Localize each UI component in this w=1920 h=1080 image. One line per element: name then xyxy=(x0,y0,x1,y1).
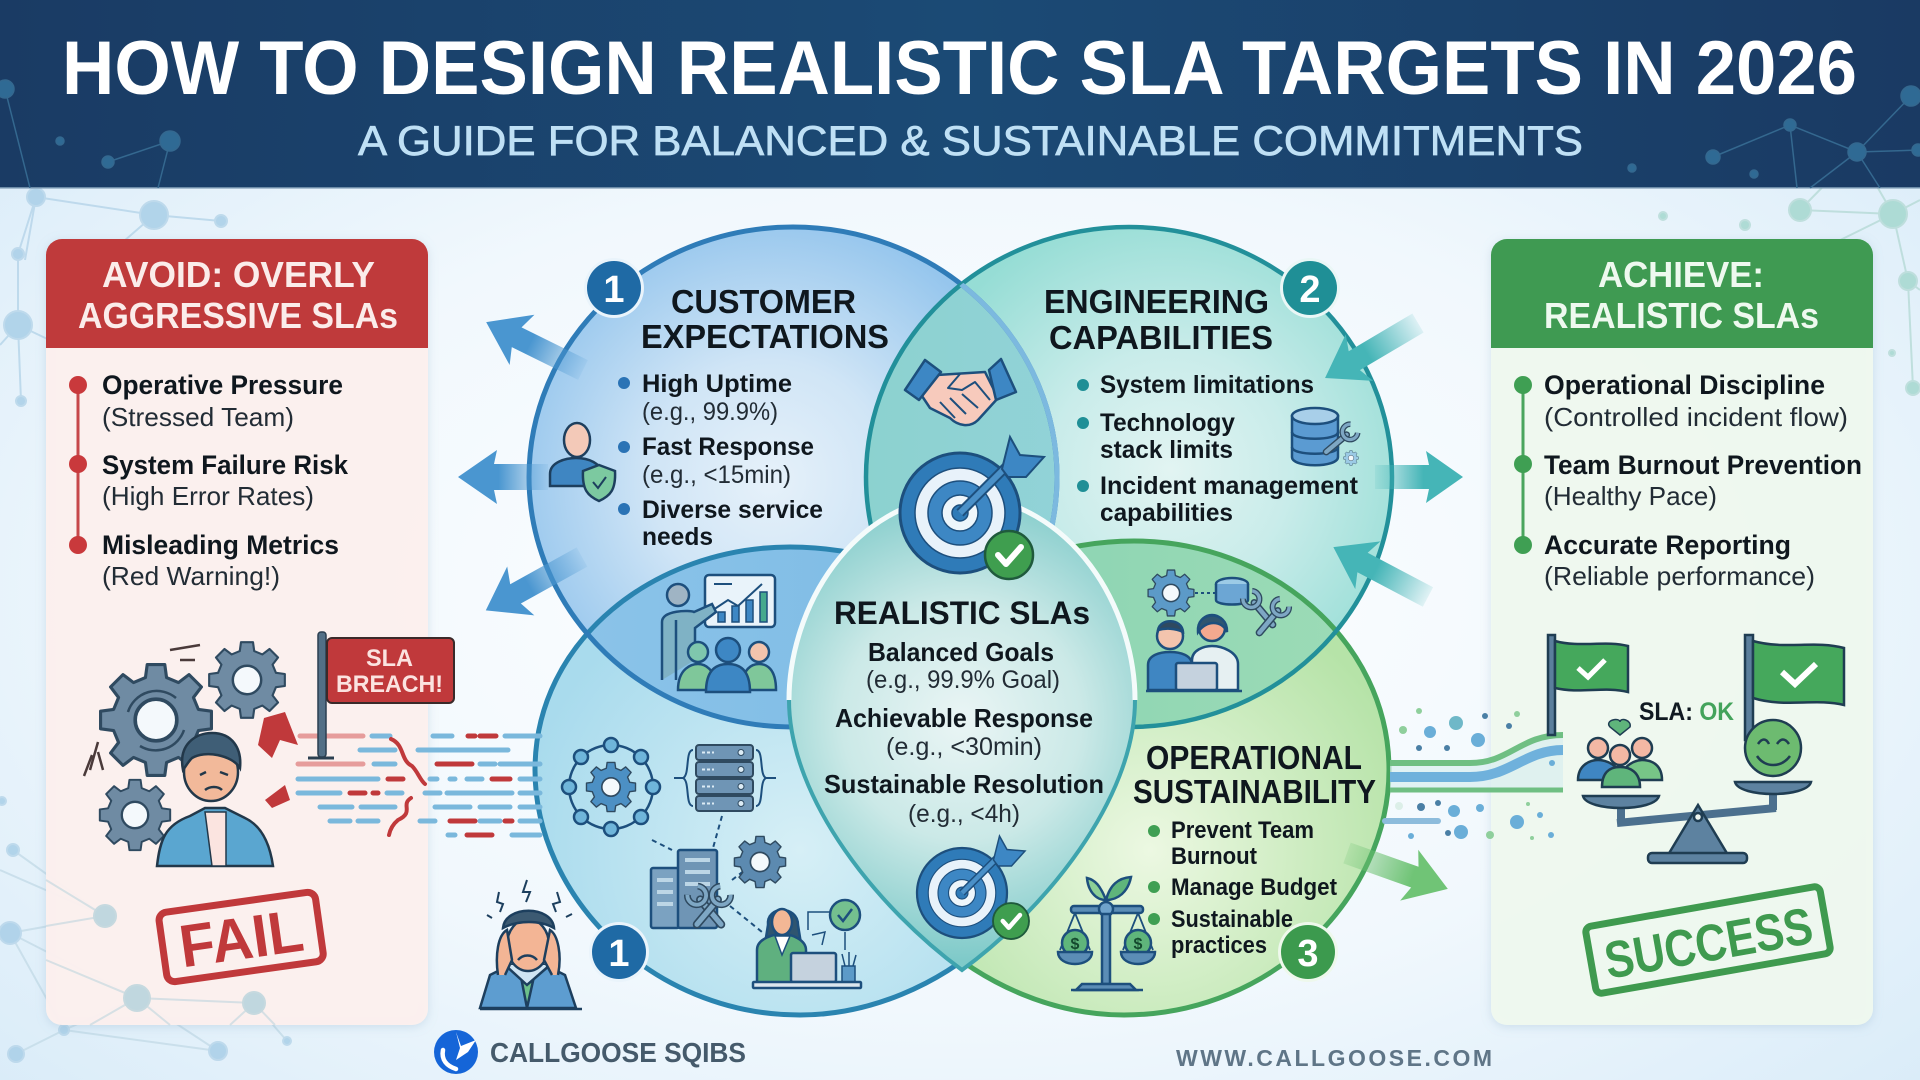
heading: CUSTOMER xyxy=(671,283,856,320)
panel heading: avoid: AVOID: OVERLY xyxy=(102,254,375,295)
center text: Balanced Goals xyxy=(868,637,1054,667)
icon: balance scale xyxy=(1583,782,1811,863)
heading: ENGINEERING xyxy=(1044,283,1269,320)
bullets: Incident management xyxy=(1100,472,1359,500)
panel heading: avoid: AGGRESSIVE SLAs xyxy=(78,295,398,336)
flag: SLA breach: SLA xyxy=(366,645,413,672)
avoid list: (Stressed Team) xyxy=(102,402,294,432)
badge 3 xyxy=(1278,922,1338,982)
overlap: customer and engineering xyxy=(868,288,1054,523)
achieve list: (Reliable performance) xyxy=(1544,561,1815,591)
avoid list: System Failure Risk xyxy=(102,450,349,480)
avoid list: (Red Warning!) xyxy=(102,561,280,591)
bullets: Diverse service xyxy=(642,496,823,524)
flag: SLA breach: BREACH! xyxy=(336,671,443,698)
title: HOW TO DESIGN REALISTIC SLA TARGETS IN 2026 xyxy=(62,26,1857,111)
section: lower left icons xyxy=(562,738,861,988)
achieve list: Team Burnout Prevention xyxy=(1544,450,1862,480)
logo: Callgoose SQIBS: CALLGOOSE SQIBS xyxy=(490,1037,746,1068)
center heading: REALISTIC SLAs xyxy=(834,595,1090,631)
flag: left xyxy=(1548,635,1628,735)
bullets: Sustainable xyxy=(1171,906,1293,933)
bullets: System limitations xyxy=(1100,371,1314,399)
bullets: practices xyxy=(1171,932,1267,959)
panel heading: avoid xyxy=(46,239,428,348)
faint network nodes showing through panel xyxy=(46,880,275,1025)
badge 2: 2 xyxy=(1299,269,1321,311)
bullets xyxy=(1148,817,1337,959)
icon: balance with sprout: $ xyxy=(1134,936,1143,953)
bullets: (e.g., <15min) xyxy=(642,461,791,489)
center text: (e.g., <4h) xyxy=(908,800,1020,828)
icon: target with check, bottom xyxy=(917,836,1029,939)
heading: CAPABILITIES xyxy=(1049,319,1273,356)
icon: user with shield xyxy=(550,423,615,501)
bullets: Technology xyxy=(1100,409,1235,437)
bullets xyxy=(618,370,823,551)
circle: engineering capabilities xyxy=(866,227,1392,727)
panel heading: achieve: REALISTIC SLAs xyxy=(1544,295,1819,336)
panel heading: achieve xyxy=(1491,239,1873,348)
overlap: customer and lower left xyxy=(590,550,840,724)
avoid list xyxy=(69,370,349,591)
bullets: capabilities xyxy=(1100,499,1233,527)
badge 1 lower: 1 xyxy=(608,933,630,975)
center text: (e.g., 99.9% Goal) xyxy=(866,666,1060,694)
achieve list: Accurate Reporting xyxy=(1544,530,1791,560)
flag: right xyxy=(1745,635,1844,740)
icon: balance with sprout: $ xyxy=(1071,936,1080,953)
badge 1 xyxy=(584,258,644,318)
icon: server stack xyxy=(652,745,776,932)
avoid list: Misleading Metrics xyxy=(102,530,339,560)
circle outlines xyxy=(529,227,1392,1015)
bullets: Burnout xyxy=(1171,843,1257,870)
heading: OPERATIONAL xyxy=(1146,739,1362,776)
badge 2 xyxy=(1280,258,1340,318)
center text xyxy=(824,637,1104,828)
avoid list: Operative Pressure xyxy=(102,370,343,400)
section: customer expectations xyxy=(550,258,889,551)
label: SLA OK: SLA: OK xyxy=(1639,698,1734,726)
icon: team with gears and laptop xyxy=(1146,570,1291,691)
heading: SUSTAINABILITY xyxy=(1133,773,1376,810)
icon: balance with sprout xyxy=(1058,877,1155,990)
icon: gear network xyxy=(562,738,660,836)
logo: Callgoose SQIBS xyxy=(434,1030,746,1074)
bullets: needs xyxy=(642,523,713,551)
arrows: outward blue arrows xyxy=(458,297,596,635)
icon: tower servers with tools xyxy=(651,836,786,930)
center text: (e.g., <30min) xyxy=(886,733,1042,761)
footer website: WWW.CALLGOOSE.COM xyxy=(1176,1045,1492,1071)
icon: team with heart xyxy=(1578,720,1662,787)
heading xyxy=(1044,283,1273,356)
section: engineering capabilities xyxy=(1044,258,1359,691)
achieve list: (Controlled incident flow) xyxy=(1544,402,1848,432)
illustration: flags, scale and team xyxy=(1548,635,1844,863)
circle: lower left xyxy=(535,547,1073,1015)
circle: customer expectations xyxy=(529,227,1057,727)
icon: presenter with chart and audience xyxy=(662,575,776,692)
badge 1: 1 xyxy=(603,269,625,311)
badge 3: 3 xyxy=(1297,933,1319,975)
heading: EXPECTATIONS xyxy=(641,318,889,355)
icon: woman at laptop xyxy=(753,900,861,988)
bullets: stack limits xyxy=(1100,436,1233,464)
stamp: SUCCESS: SUCCESS xyxy=(1600,897,1817,991)
icon: stressed man xyxy=(480,880,582,1009)
background network decoration, right xyxy=(1659,152,1920,395)
stamp: FAIL: FAIL xyxy=(175,897,307,980)
badge 1 lower xyxy=(589,922,649,982)
center text: Achievable Response xyxy=(835,703,1093,733)
background network decoration, left xyxy=(0,188,291,1062)
panel: avoid overly aggressive SLAs xyxy=(46,239,428,1025)
illustration: stressed engineer with gears xyxy=(84,642,298,866)
panel heading: achieve: ACHIEVE: xyxy=(1598,254,1764,295)
flag: SLA breach xyxy=(308,632,454,758)
center text: Sustainable Resolution xyxy=(824,769,1104,799)
achieve list: Operational Discipline xyxy=(1544,370,1825,400)
arrows: teal and green xyxy=(1311,300,1463,914)
bullets: Fast Response xyxy=(642,433,814,461)
achieve list: (Healthy Pace) xyxy=(1544,481,1717,511)
center shape: realistic SLAs xyxy=(789,495,1135,970)
section: operational sustainability xyxy=(1058,739,1376,990)
overlap: engineering and sustainability xyxy=(1080,544,1333,725)
heading xyxy=(641,283,889,355)
bullets: High Uptime xyxy=(642,370,792,398)
bullets: Manage Budget xyxy=(1171,874,1337,901)
bullets xyxy=(1077,371,1359,527)
subtitle: A GUIDE FOR BALANCED & SUSTAINABLE COMMITMENTS xyxy=(358,117,1583,164)
venn: overlapping circles xyxy=(529,227,1392,1015)
stream: broken dashed lines xyxy=(298,736,540,835)
avoid list: (High Error Rates) xyxy=(102,481,314,511)
bullets: Prevent Team xyxy=(1171,817,1314,844)
circle: operational sustainability xyxy=(851,541,1389,1015)
icon: smiley xyxy=(1745,720,1801,776)
icon: database with wrench xyxy=(1292,408,1359,465)
bullets: (e.g., 99.9%) xyxy=(642,398,778,426)
stream: calm lines into achieve panel xyxy=(1385,708,1563,840)
header band xyxy=(0,0,1920,188)
icon: handshake xyxy=(905,359,1016,425)
icon: target with check, top xyxy=(900,437,1044,579)
achieve list xyxy=(1514,370,1862,591)
panel: achieve realistic SLAs xyxy=(1491,239,1873,1025)
heading xyxy=(1133,739,1376,810)
